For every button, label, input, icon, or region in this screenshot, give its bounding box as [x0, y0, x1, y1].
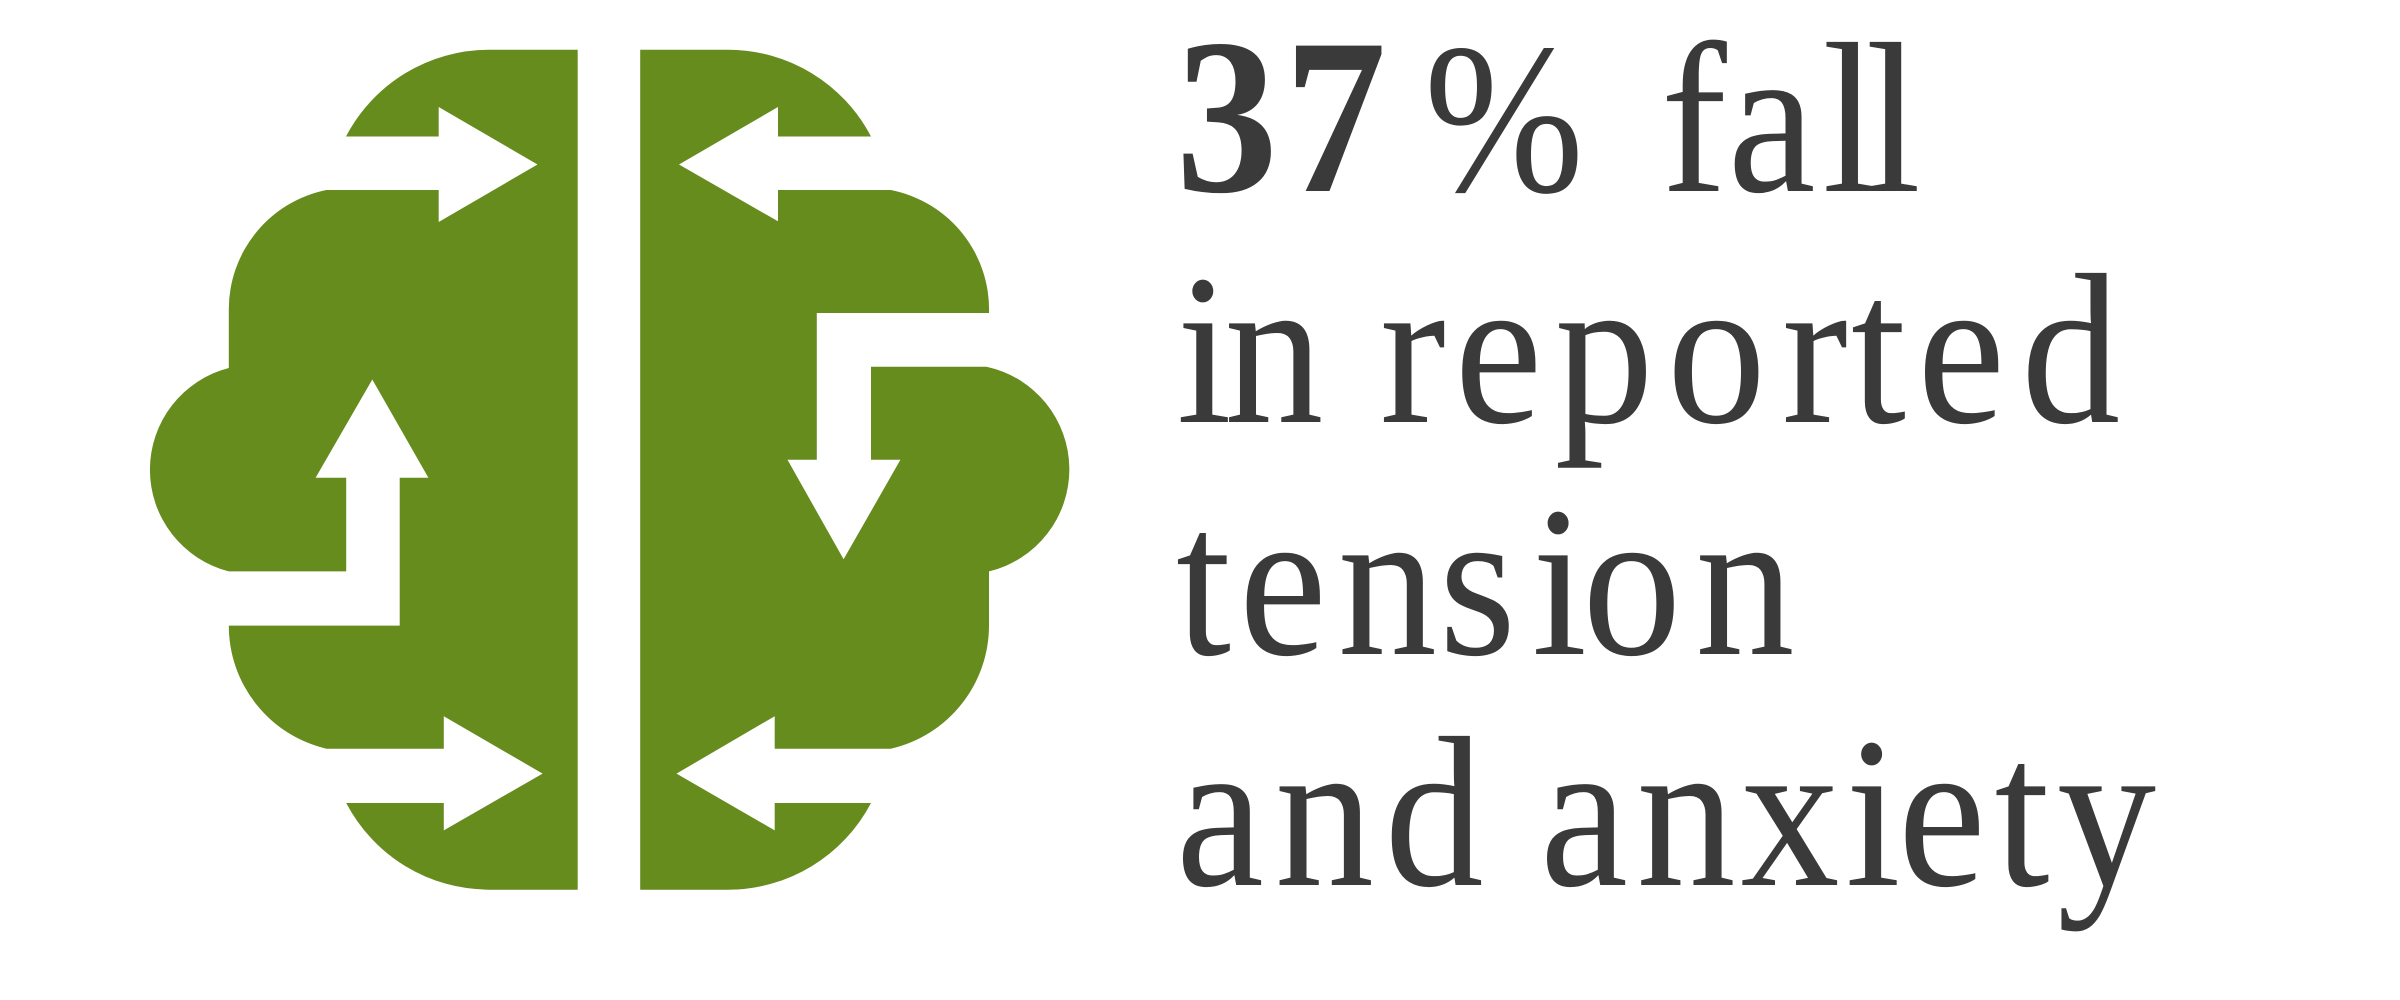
- line 2: in reported: reported: [1380, 230, 2120, 469]
- line 1: 37% fall: fall: [1661, 0, 1921, 238]
- line 4: and anxiety: anxiety: [1540, 693, 2156, 932]
- line 1: 37% fall: [1176, 0, 1921, 240]
- icon: brain with arrows: [150, 50, 1069, 890]
- line 4: and anxiety: and: [1176, 693, 1483, 932]
- left brain hemisphere with arrows: [150, 50, 578, 890]
- statistic text block: [1176, 0, 2156, 932]
- right brain hemisphere with arrows: [640, 50, 1069, 890]
- line 1: 37% fall: 37: [1176, 0, 1386, 240]
- line 1: 37% fall: %: [1424, 0, 1584, 238]
- line 3: tension: tension: [1176, 462, 1794, 701]
- line 4: and anxiety: [1176, 693, 2156, 932]
- line 2: in reported: in: [1177, 230, 1323, 469]
